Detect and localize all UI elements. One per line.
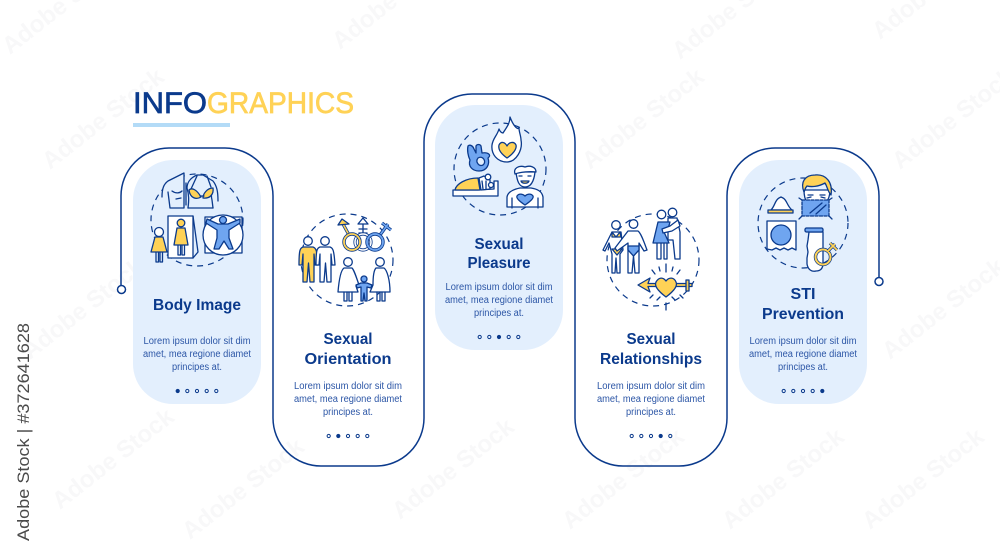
heading: Pleasure bbox=[468, 255, 531, 272]
heading: Sexual bbox=[474, 236, 524, 253]
text block bbox=[143, 336, 251, 373]
text: Adobe Stock bbox=[37, 63, 170, 175]
icon: condom, mask and test tube bbox=[758, 175, 848, 271]
text block: principes at. bbox=[172, 362, 222, 373]
text: Adobe Stock bbox=[857, 423, 990, 535]
heading: Prevention bbox=[762, 306, 844, 323]
connecting outline bbox=[118, 94, 883, 466]
pagination dots bbox=[176, 389, 218, 393]
heading: Orientation bbox=[304, 351, 392, 368]
pagination dots bbox=[630, 434, 672, 438]
text block bbox=[597, 381, 705, 418]
heading: Sexual bbox=[626, 331, 676, 348]
heading bbox=[304, 331, 392, 368]
text block: Lorem ipsum dolor sit dim bbox=[446, 282, 552, 293]
heading: Sexual bbox=[324, 331, 372, 348]
text block: amet, mea regione diamet bbox=[294, 394, 402, 405]
text: Adobe Stock bbox=[17, 253, 150, 365]
panel: sexual pleasure bbox=[445, 117, 553, 339]
text block: Lorem ipsum dolor sit dim bbox=[597, 381, 705, 392]
heading bbox=[468, 236, 531, 272]
panel backgrounds: light blue cards bbox=[133, 105, 867, 404]
text: Adobe Stock bbox=[577, 63, 710, 175]
text block: amet, mea regione diamet bbox=[143, 349, 251, 360]
heading bbox=[600, 331, 702, 368]
pagination dots bbox=[478, 335, 520, 339]
text block: Lorem ipsum dolor sit dim bbox=[144, 336, 250, 347]
title: GRAPHICS bbox=[207, 87, 354, 120]
heading: Relationships bbox=[600, 351, 702, 368]
text block bbox=[749, 336, 857, 373]
icon: flame, hand, bed and happy man bbox=[453, 117, 546, 215]
text block: principes at. bbox=[778, 362, 828, 373]
text block: amet, mea regione diamet bbox=[749, 349, 857, 360]
panel: sti prevention bbox=[749, 175, 857, 393]
text block: principes at. bbox=[323, 407, 373, 418]
icon: couples and heart with arrow bbox=[603, 208, 699, 310]
text block: Lorem ipsum dolor sit dim bbox=[294, 381, 402, 392]
pagination dots bbox=[327, 434, 369, 438]
text block: amet, mea regione diamet bbox=[445, 295, 553, 306]
icon: orientation symbols and family bbox=[299, 214, 393, 306]
heading: STI bbox=[790, 286, 816, 303]
panel: body image bbox=[143, 173, 251, 393]
panel: sexual relationships bbox=[597, 208, 705, 438]
pagination dots bbox=[782, 389, 824, 393]
text: Adobe Stock bbox=[717, 423, 850, 535]
title: INFO bbox=[133, 87, 207, 120]
stock credit: Adobe Stock | #372641628 bbox=[15, 323, 33, 541]
heading: Body Image bbox=[153, 297, 241, 314]
text block: principes at. bbox=[474, 308, 524, 319]
heading bbox=[762, 286, 844, 323]
panel: sexual orientation bbox=[294, 214, 402, 438]
text block: Lorem ipsum dolor sit dim bbox=[750, 336, 856, 347]
title bbox=[133, 87, 354, 127]
text: Adobe Stock bbox=[387, 413, 520, 525]
text: Adobe Stock bbox=[47, 403, 180, 515]
text: Adobe Stock bbox=[557, 423, 690, 535]
text block: amet, mea regione diamet bbox=[597, 394, 705, 405]
text: Adobe Stock bbox=[177, 433, 310, 545]
text block: principes at. bbox=[626, 407, 676, 418]
icon: body image bbox=[151, 173, 243, 266]
text block bbox=[445, 282, 553, 319]
text block bbox=[294, 381, 402, 418]
